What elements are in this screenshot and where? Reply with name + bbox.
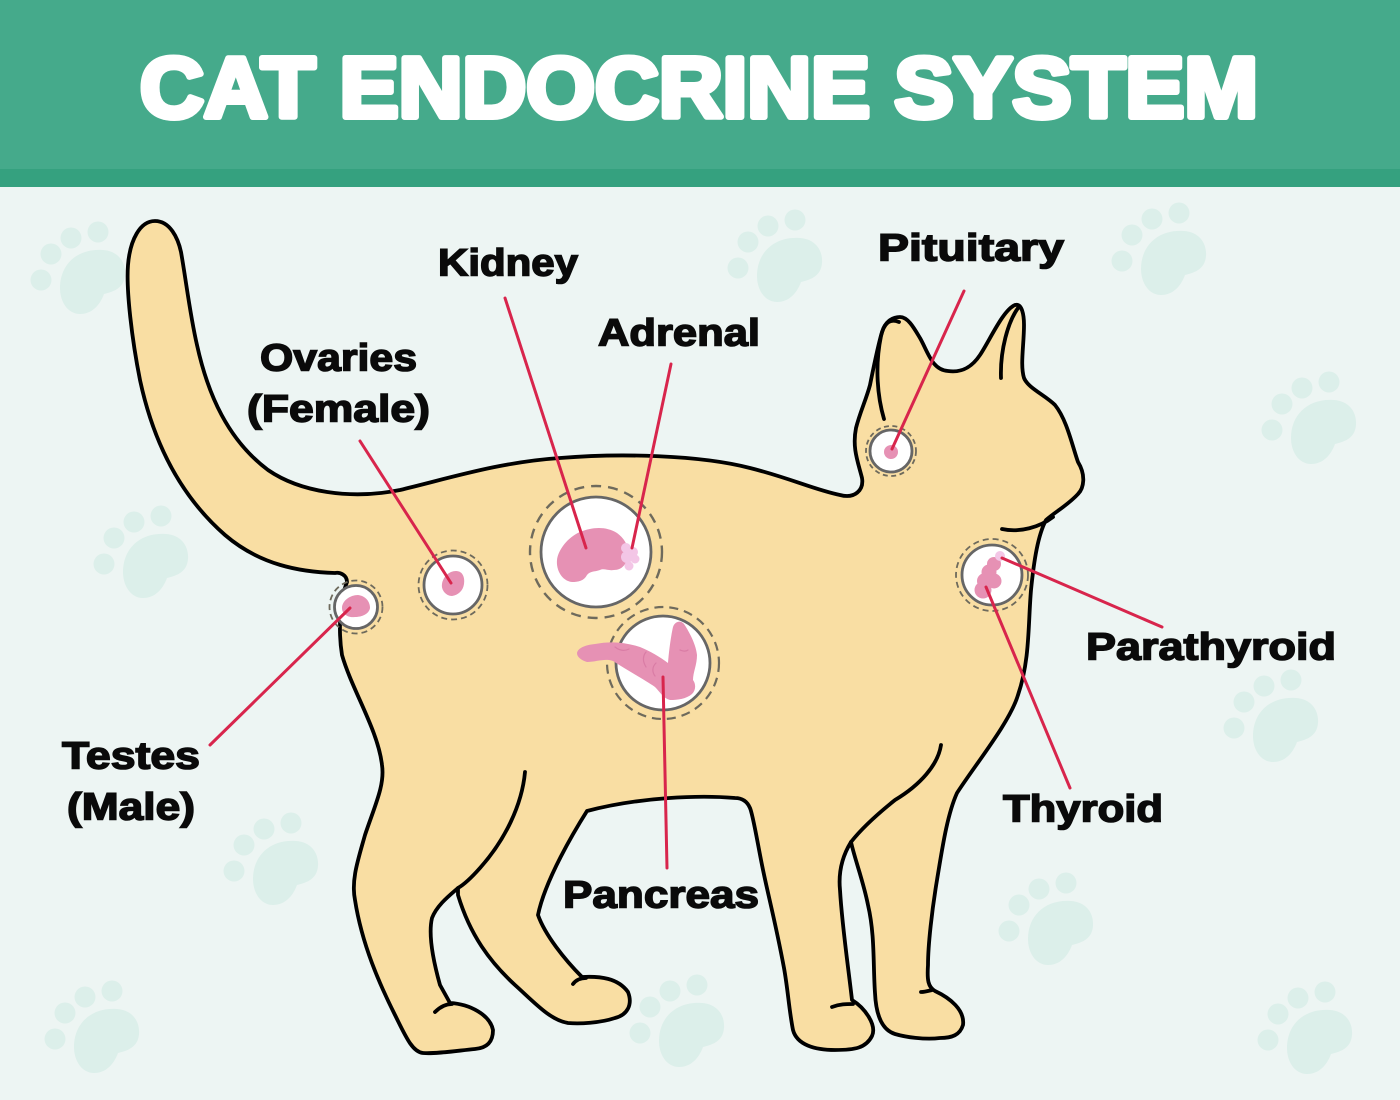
pointer line: pancreas: [663, 677, 667, 868]
cat inner contour lines: [435, 308, 1053, 1012]
thyroid organ: [974, 557, 1002, 598]
pointer line: kidney: [505, 298, 586, 548]
kidney organ: [557, 528, 628, 582]
label: testes male: [62, 736, 200, 828]
header banner: [0, 0, 1400, 187]
ovaries inset: [418, 550, 488, 620]
pancreas inset: [577, 607, 719, 719]
thyroid and parathyroid inset: [956, 539, 1028, 611]
pituitary inset: [866, 426, 916, 476]
label: parathyroid: Parathyroid: [1086, 626, 1336, 668]
testes inset: [330, 580, 382, 634]
cat body silhouette: [128, 221, 1083, 1053]
pointer line: ovaries: [360, 441, 451, 583]
pointer line: testes: [210, 608, 350, 745]
label: kidney: Kidney: [438, 242, 578, 284]
background paw prints: [30, 202, 1356, 1074]
pancreas organ: [577, 622, 697, 700]
pointer line: thyroid: [986, 587, 1070, 788]
label: ovaries female: [247, 338, 430, 430]
pointer line: adrenal: [632, 364, 671, 548]
adrenal organ: [621, 543, 640, 570]
label: pancreas: Pancreas: [563, 874, 759, 916]
pointer line: parathyroid: [1002, 558, 1162, 627]
parathyroid organ: [995, 551, 1005, 561]
label: pituitary: Pituitary: [878, 228, 1064, 270]
label: testes male: Testes: [62, 736, 200, 778]
label: adrenal: Adrenal: [598, 312, 760, 354]
label: ovaries female: (Female): [247, 388, 430, 430]
kidney and adrenal inset: [530, 486, 662, 618]
label: testes male: (Male): [67, 786, 195, 828]
label: ovaries female: Ovaries: [260, 338, 417, 380]
pointer line: pituitary: [892, 291, 964, 449]
label: thyroid: Thyroid: [1003, 788, 1163, 830]
title: CAT ENDOCRINE SYSTEM: [140, 41, 1258, 136]
